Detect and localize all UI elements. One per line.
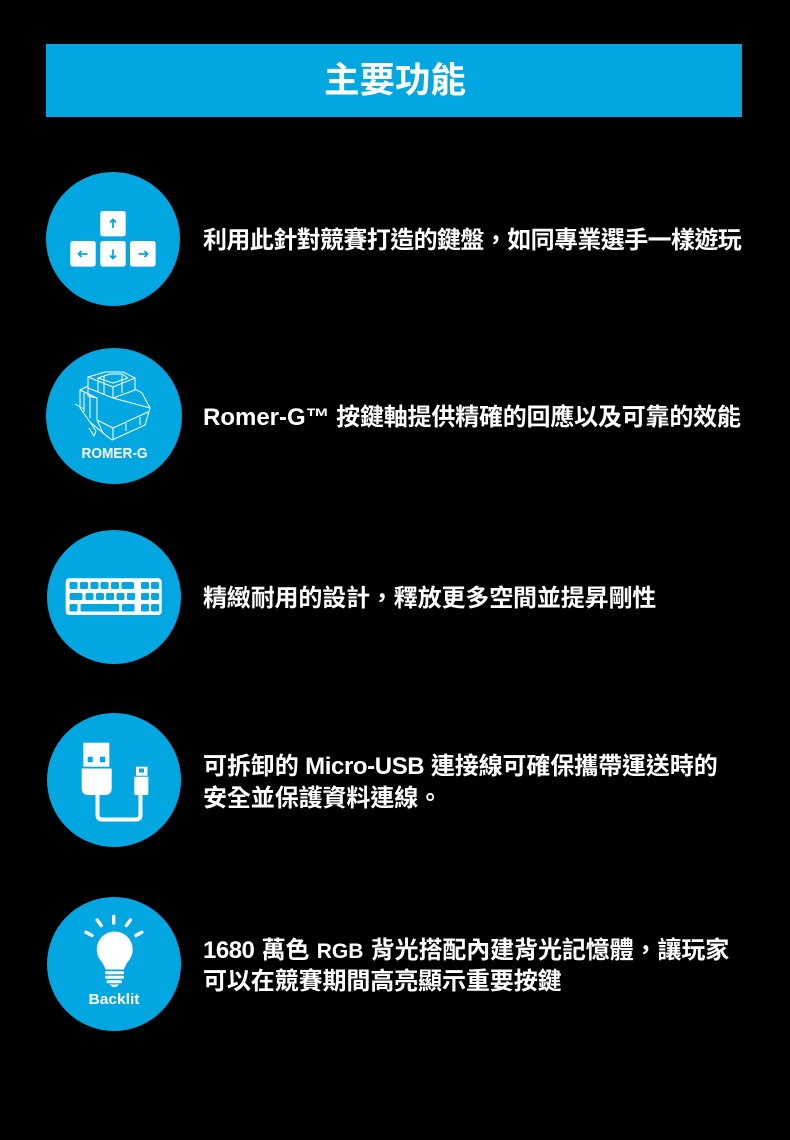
title banner	[46, 44, 742, 117]
icon: Romer-G switch: ROMER-G	[82, 446, 148, 462]
icon: backlight bulb	[47, 897, 181, 1031]
feature text: RGB backlight: 1680 萬色 RGB 背光搭配內建背光記憶體，讓玩家	[203, 937, 729, 964]
icon: compact keyboard	[47, 530, 181, 664]
feature text: RGB backlight line two: 可以在競賽期間高亮顯示重要按鍵	[203, 968, 562, 995]
title banner: 主要功能	[324, 60, 466, 100]
feature text: detachable cable: 可拆卸的 Micro-USB 連接線可確保攜帶運送時的	[203, 753, 718, 780]
icon: Romer-G switch	[46, 348, 182, 484]
feature text: tournament keyboard: 利用此針對競賽打造的鍵盤，如同專業選手一樣遊玩	[203, 227, 741, 254]
icon: micro-USB cable	[47, 713, 181, 847]
feature text: durable design: 精緻耐用的設計，釋放更多空間並提昇剛性	[203, 585, 656, 612]
feature text: Romer-G switches: Romer-G™ 按鍵軸提供精確的回應以及可靠的效能	[203, 404, 741, 431]
feature text: detachable cable line two: 安全並保護資料連線。	[203, 785, 442, 812]
icon: backlight bulb: Backlit	[88, 991, 140, 1008]
icon: arrow keys	[46, 172, 180, 306]
